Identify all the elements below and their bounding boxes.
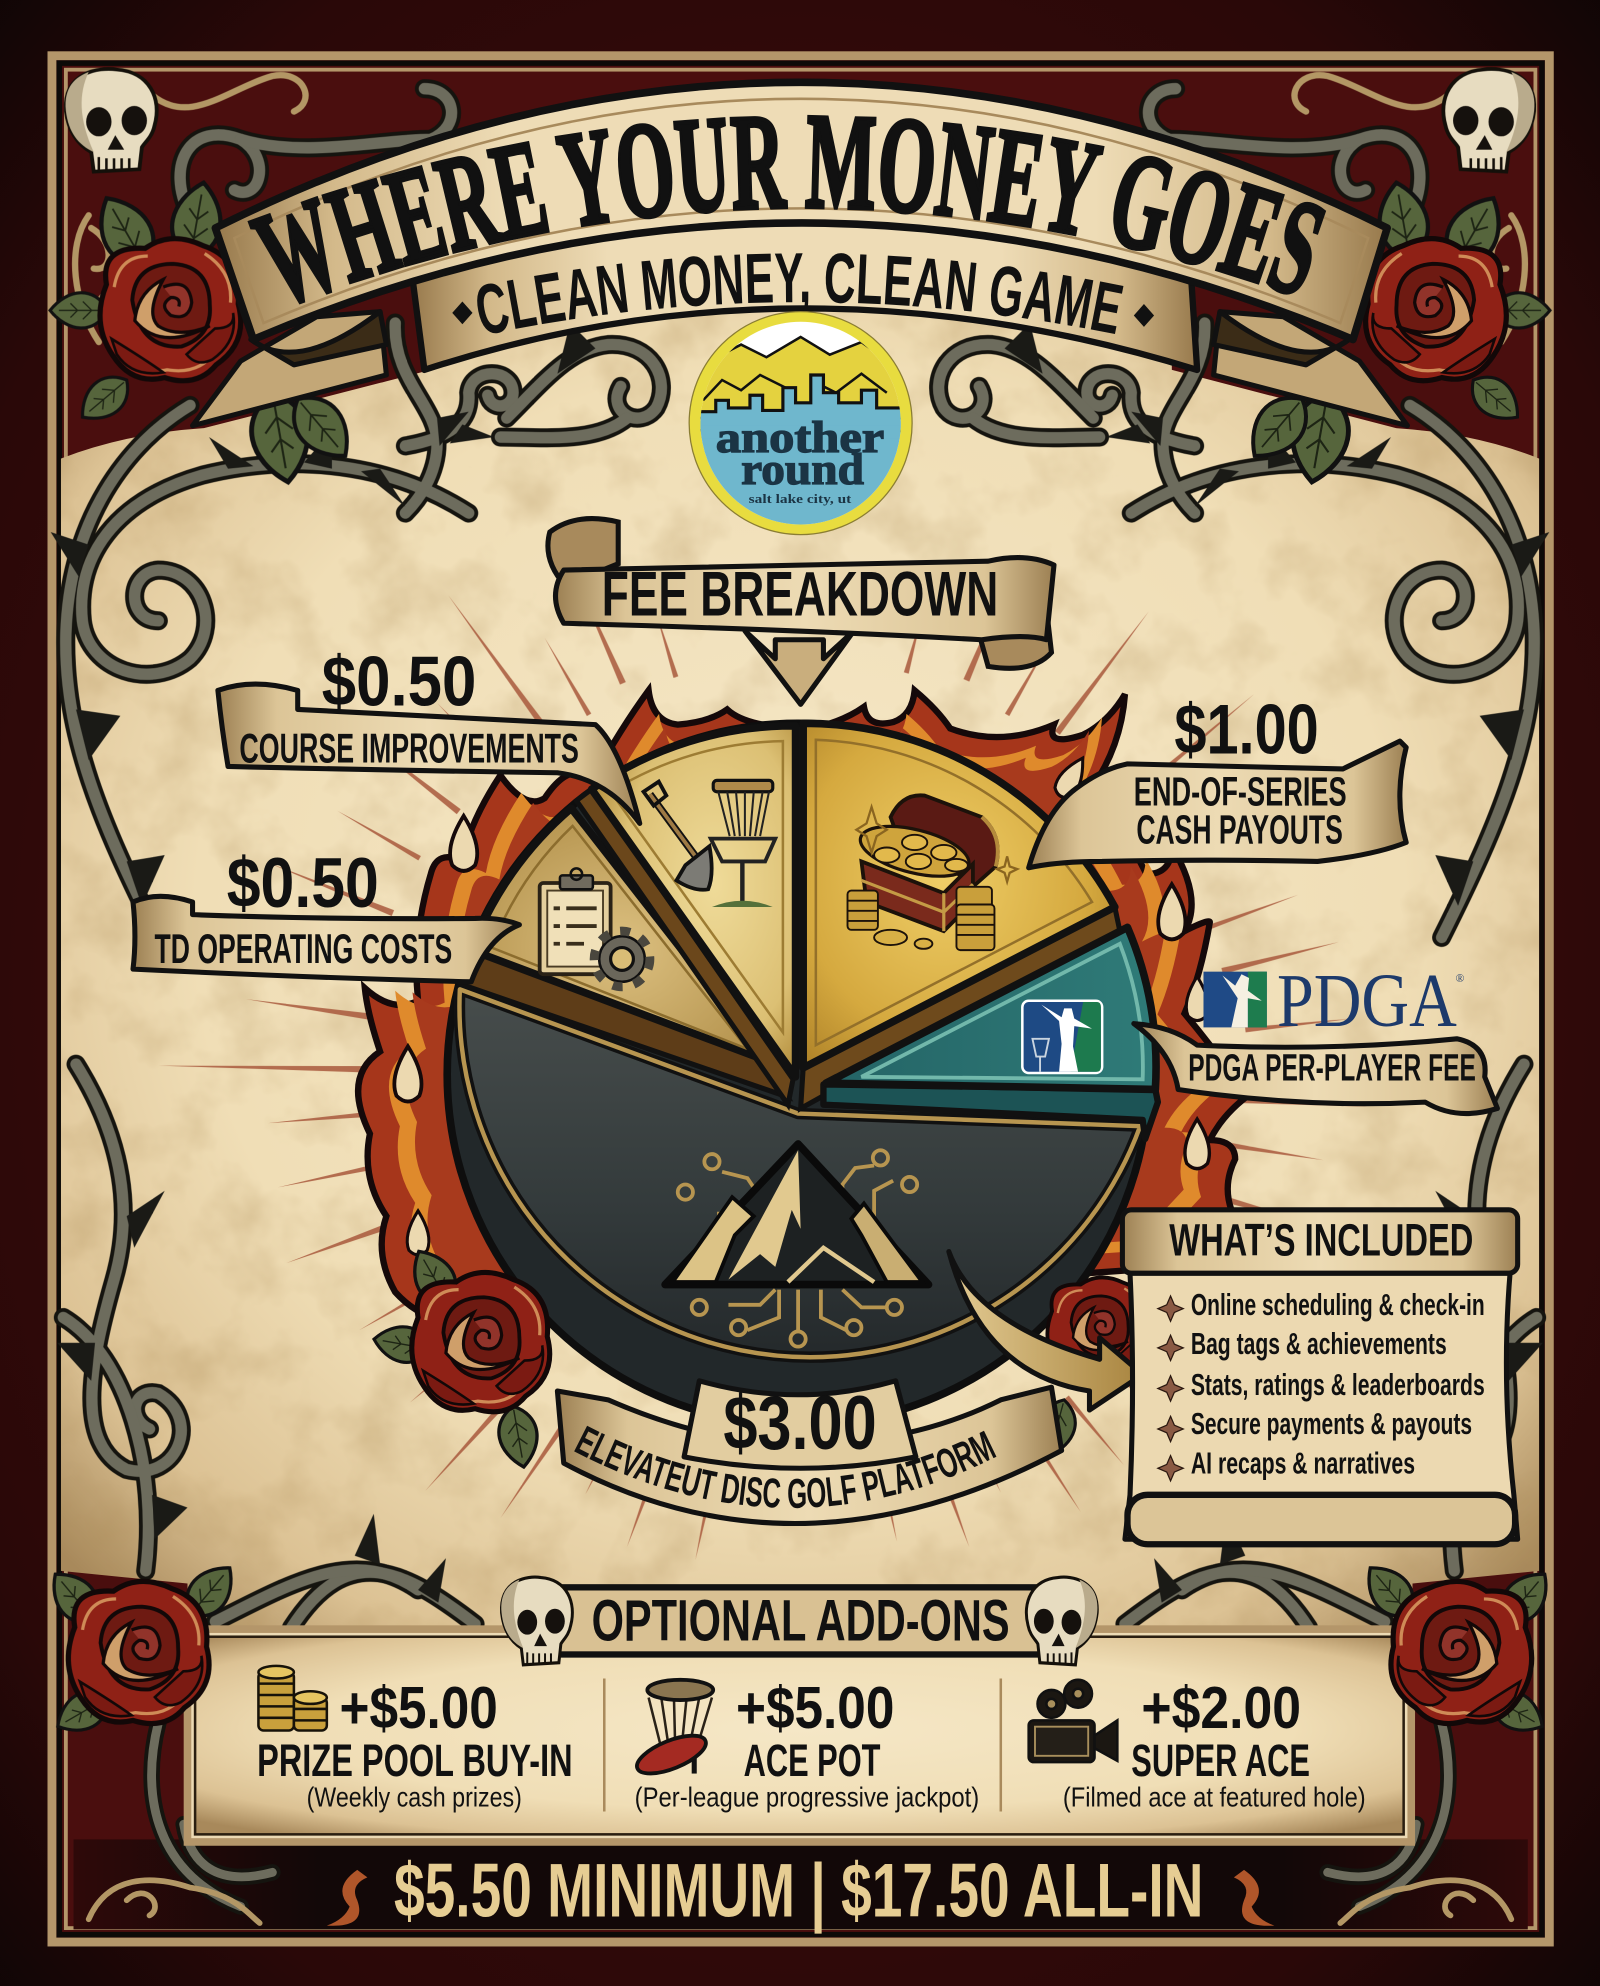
icon: skull top left [66,69,157,172]
price: $3.00 [723,1381,877,1466]
wedge: PDGA [823,927,1158,1139]
amount: $0.50 [227,844,379,923]
ribbon curl right [975,608,1051,668]
amount: $1.00 [1174,691,1319,770]
arrow to what's included [949,1252,1143,1410]
heading text: FEE BREAKDOWN [602,560,998,630]
label: course improvements [218,643,640,823]
wedge: TD base and top [461,808,788,1097]
platform ribbon [557,1387,1062,1524]
panel heading: WHAT’S INCLUDED [1169,1214,1473,1265]
platform label [554,1378,1064,1526]
PDGA logo [1203,959,1465,1043]
description: TD OPERATING COSTS [155,925,452,972]
label: cash payouts [1029,691,1406,868]
icon: mountain with circuits [665,1144,929,1347]
rose under pie left [371,1242,550,1470]
logo: another round: another [716,412,884,462]
pie: dark base [447,723,1149,1425]
description [1134,769,1347,853]
icon: skull add-ons left [501,1577,572,1665]
logo: another round: salt lake city, ut [749,492,852,506]
icon: PDGA badge [1022,1001,1102,1073]
pie chart [447,723,1158,1425]
dividers [604,1679,1001,1812]
add-on: super ace: +$2.00 [1141,1674,1301,1741]
rose under pie right [1032,1277,1151,1460]
icon: treasure chest with coins [848,795,1017,950]
heading: optional add-ons: OPTIONAL ADD-ONS [592,1589,1010,1654]
icon: rose bottom right [1356,1556,1559,1742]
title: WHERE YOUR MONEY GOES [248,114,1326,304]
icon: basket and disc [632,1680,713,1781]
scroll top roll [1122,1210,1518,1273]
scroll body [1125,1273,1518,1539]
ribbon arrow [745,631,854,704]
flame accent left [327,1870,367,1926]
add-on: prize pool: (Weekly cash prizes) [307,1781,522,1812]
label: PDGA [1134,959,1497,1114]
corner flourishes [75,75,1525,342]
footer total: $5.50 MINIMUM | $17.50 ALL-IN [394,1849,1203,1935]
add-on: ace pot: ACE POT [744,1735,881,1786]
wedge: series payouts [801,723,1120,1108]
add-on: ace pot [632,1674,979,1812]
subtitle text: CLEAN MONEY, CLEAN GAME [477,253,1124,334]
add-on: prize pool [257,1666,573,1812]
flame accent right [1234,1870,1274,1926]
feature list: Bag tags & achievements [1191,1327,1447,1361]
ribbon main [556,558,1054,640]
flames [358,690,1248,1319]
add-on: super ace: (Filmed ace at featured hole) [1063,1781,1366,1812]
wedge: course improvements [576,726,796,1105]
feature list: AI recaps & narratives [1191,1446,1415,1480]
label: TD operating costs [133,844,519,982]
panel: optional add-ons [187,1629,1411,1842]
icon: coin stacks [258,1666,327,1730]
ribbon curl left [548,519,618,585]
subtitle diamonds [452,302,1154,327]
bottom thorn vines [152,1723,1448,1907]
description: CASH PAYOUTS [1136,807,1343,853]
PDGA logo: PDGA [1277,959,1457,1043]
add-on: super ace [1029,1674,1366,1812]
title banner tails [193,312,1407,426]
PDGA logo: ® [1456,973,1465,985]
wedge: platform [459,989,1140,1357]
feature list [1158,1288,1485,1481]
description: END-OF-SERIES [1134,769,1347,815]
icon: rose top right [1237,179,1550,487]
price plate [684,1381,916,1468]
bottom corner flourishes [89,1880,1511,1923]
thorn vines [51,89,1549,1628]
platform name: ELEVATEUT DISC GOLF PLATFORM [574,1426,996,1508]
subtitle banner [410,226,1200,374]
icon: shovel and disc golf basket [644,780,775,907]
add-on: ace pot: +$5.00 [736,1674,894,1741]
description: COURSE IMPROVEMENTS [239,725,579,772]
icon: rose bottom left [41,1556,244,1742]
parchment background [61,279,1540,1647]
icon: skull add-ons right [1026,1577,1097,1665]
sunburst rays [158,551,1368,1561]
logo: another round: round [741,444,864,494]
footer band [73,1839,1528,1929]
add-on: ace pot: (Per-league progressive jackpot) [635,1781,979,1812]
amount: $0.50 [322,643,476,722]
add-on: super ace: SUPER ACE [1131,1735,1310,1786]
scroll bottom roll [1127,1495,1515,1544]
icon: skull top right [1443,69,1534,172]
feature list: Secure payments & payouts [1191,1407,1472,1441]
add-on: prize pool: +$5.00 [340,1674,498,1741]
logo: another round [689,312,912,535]
icon: film camera [1029,1680,1117,1762]
icon: rose top left [50,179,363,487]
icon: clipboard and gear [540,868,650,987]
panel: what's included [1122,1210,1518,1544]
main title banner [212,78,1391,344]
fee breakdown heading [548,519,1054,704]
add-on: prize pool: PRIZE POOL BUY-IN [257,1735,573,1786]
